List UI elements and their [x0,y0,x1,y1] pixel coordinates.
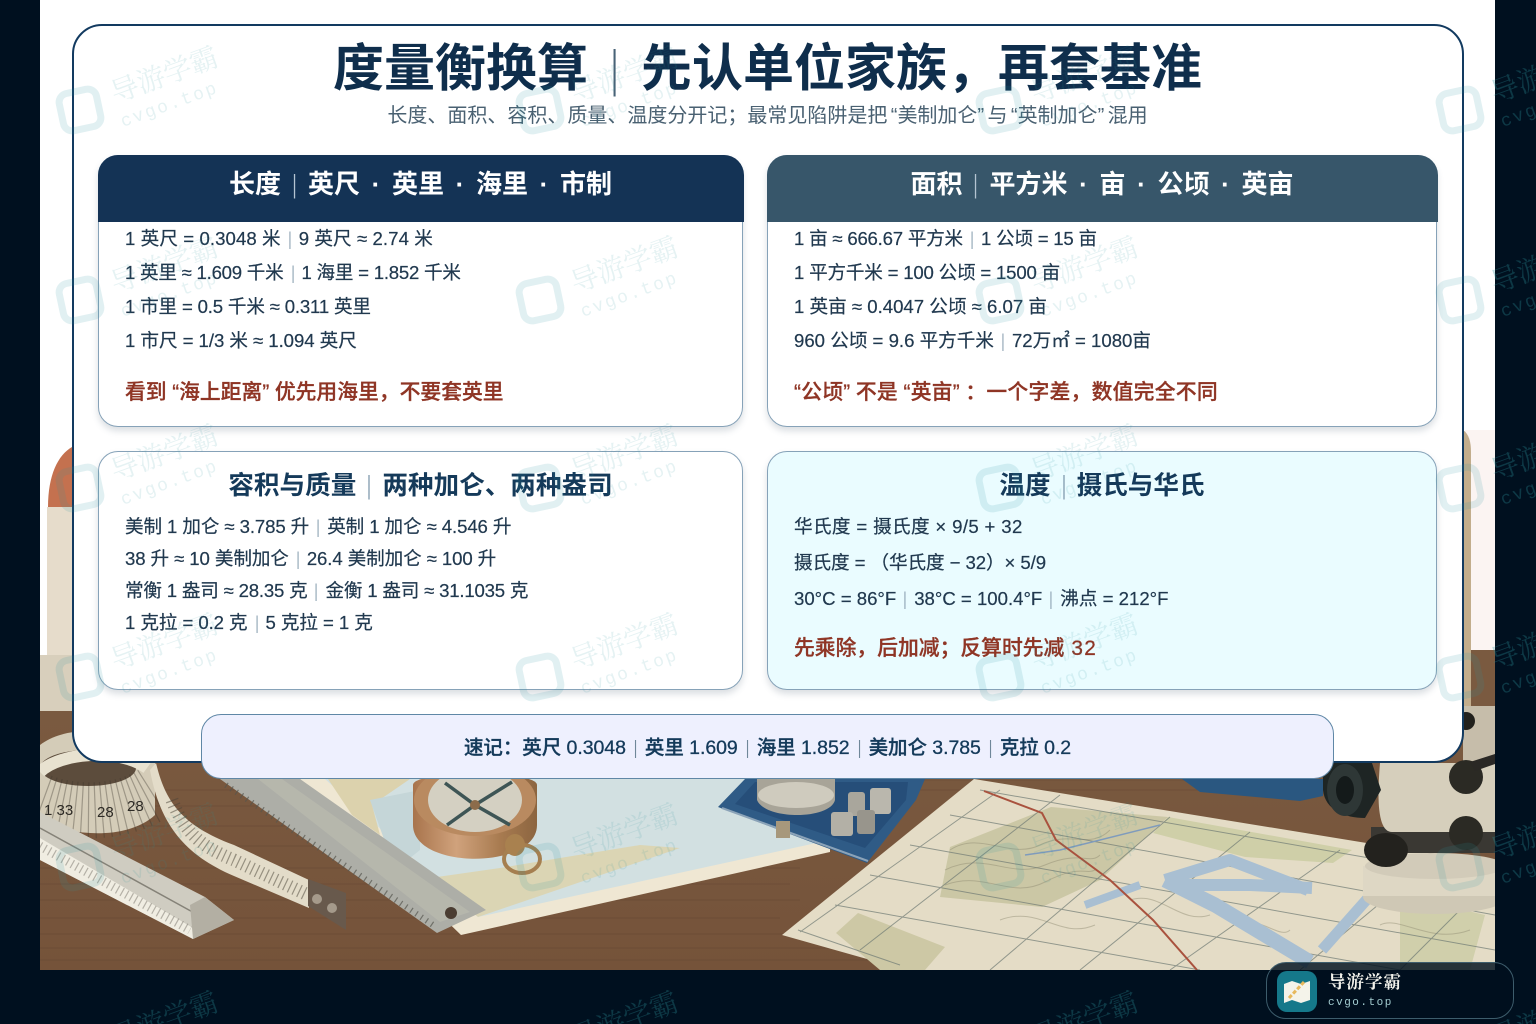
panel: area [767,155,1437,427]
watermark layer: cvgo.top [118,269,221,323]
panel title: volume and mass: 容积与质量 两种加仑、两种盎司 [228,472,613,500]
temperature line 2: 摄氏度 = （华氏度 − 32）× 5/9 [794,552,1046,573]
length line 2: 1 英里 ≈ 1.609 千米 1 海里 = 1.852 千米 [125,262,461,283]
length line 1: | [288,228,291,249]
area line 1: | [970,228,974,249]
compass [413,779,542,875]
panel header: area: · [1137,168,1146,198]
panel header: length: | [292,168,296,198]
watermark layer: cvgo.top [1038,836,1141,890]
steel ruler [220,779,486,933]
panel header: length: 长度 英尺 英里 海里 市制 [229,168,612,198]
panel header: area [766,154,1438,222]
watermark layer: cvgo.top [1038,79,1141,133]
brand badge [1266,962,1514,1019]
watermark layer: cvgo.top [118,646,221,700]
watermark layer: cvgo.top [578,646,681,700]
area line 4: | [1001,330,1005,351]
panel header: area: · [1221,168,1230,198]
panel title: volume and mass: | [367,472,371,500]
tape measure: 1 33 [44,802,73,819]
tape measure: 28 [97,804,114,821]
title: 度量衡换算 先认单位家族，再套基准 [333,40,1202,97]
temperature line 3: 30°C = 86°F 38°C = 100.4°F 沸点 = 212°F [794,588,1168,609]
length line 4: 1 市尺 = 1/3 米 ≈ 1.094 英尺 [125,330,357,351]
watermark layer: 导游学霸 [566,608,682,676]
watermark layer: 导游学霸 [1026,41,1142,109]
panel title: temperature: 温度 摄氏与华氏 [999,472,1205,500]
panel: volume and mass [98,451,743,690]
watermark layer: cvgo.top [118,836,221,890]
length line 1: 1 英尺 = 0.3048 米 9 英尺 ≈ 2.74 米 [125,228,433,249]
watermark layer: 导游学霸 [1026,419,1142,487]
watermark layer: cvgo.top [578,269,681,323]
title: | [611,40,618,97]
watermark layer: 导游学霸 [106,231,222,299]
blue case behind [1182,779,1323,801]
icon: folded map logo [1277,971,1317,1012]
length line 3: 1 市里 = 0.5 千米 ≈ 0.311 英里 [125,296,371,317]
temperature line 1: 华氏度 = 摄氏度 × 9/5 + 32 [794,516,1023,537]
watermark layer: cvgo.top [118,79,221,133]
temperature line 3: | [1050,588,1053,609]
watermark layer: cvgo.top [118,457,221,511]
watermark layer: cvgo.top [578,457,681,511]
theodolite base right strip [1463,706,1495,766]
topographic map [782,779,1495,970]
tape measure [40,731,346,930]
watermark layer: cvgo.top [1038,457,1141,511]
sea chart [300,779,830,935]
panel title: temperature: | [1062,472,1066,500]
brand name: 导游学霸 [1328,972,1402,992]
watermark layer: 导游学霸 [566,419,682,487]
main white card [72,24,1464,763]
length warning: 看到 “海上距离”优先用海里，不要套英里 [125,381,504,404]
panel header: length: · [456,168,464,198]
volume line 2: | [296,548,299,569]
watermark layer: 导游学霸 [106,419,222,487]
area line 4: 960 公顷 = 9.6 平方千米 72万㎡ = 1080亩 [794,330,1151,351]
panel header: length: · [372,168,380,198]
stone pillar left [40,447,72,711]
mass line 4: 1 克拉 = 0.2 克 5 克拉 = 1 克 [125,612,373,633]
quick memory pill: | [745,737,749,759]
watermark layer: 导游学霸 [566,231,682,299]
mass line 3: | [315,580,318,601]
watermark layer: 导游学霸 [1026,608,1142,676]
watermark layer: cvgo.top [1038,646,1141,700]
temperature warning: 先乘除，后加减；反算时先减 32 [794,637,1097,660]
watermark layer: 导游学霸 [566,41,682,109]
length line 2: | [291,262,294,283]
panel header: length [98,154,744,222]
quick memory pill: | [989,737,992,759]
volume line 2: 38 升 ≈ 10 美制加仑 26.4 美制加仑 ≈ 100 升 [125,548,496,569]
tan column right [1464,430,1471,706]
theodolite instrument [1323,712,1507,914]
panel header: area: 面积 平方米 亩 公顷 英亩 [910,168,1294,198]
area line 3: 1 英亩 ≈ 0.4047 公顷 ≈ 6.07 亩 [794,296,1047,317]
triangular scale ruler [40,812,234,939]
watermark layer: cvgo.top [578,836,681,890]
quick memory pill: | [857,737,861,759]
area warning: “公顷”不是 “英亩”：一个字差，数值完全不同 [794,381,1218,404]
watermark layer: 导游学霸 [106,608,222,676]
watermark layer: 导游学霸 [106,41,222,109]
brand url: cvgo.top [1328,997,1393,1009]
area line 2: 1 平方千米 = 100 公顷 = 1500 亩 [794,262,1060,283]
panel: temperature [767,451,1437,690]
panel header: length: · [540,168,548,198]
volume line 1: | [317,516,320,537]
panel header: area: · [1079,168,1088,198]
tape measure: 28 [127,798,144,815]
quick memory pill: | [634,737,637,759]
watermark layer: 导游学霸 [566,798,682,866]
weight set case [718,779,925,863]
quick memory pill [201,714,1334,779]
watermark layer: 导游学霸 [106,798,222,866]
volume line 1: 美制 1 加仑 ≈ 3.785 升 英制 1 加仑 ≈ 4.546 升 [125,516,511,537]
watermark layer: 导游学霸 [1026,231,1142,299]
watermark layer: cvgo.top [578,79,681,133]
subtitle: 长度、面积、容积、质量、温度分开记；最常见陷阱是把“美制加仑”与“英制加仑”混用 [387,105,1148,127]
watermark layer: 导游学霸 [1026,798,1142,866]
area line 1: 1 亩 ≈ 666.67 平方米 1 公顷 = 15 亩 [794,228,1097,249]
quick memory pill: 速记：英尺 0.3048 英里 1.609 海里 1.852 美加仑 3.785 克拉 0.2 [464,737,1071,759]
temperature line 3: | [904,588,907,609]
mass line 3: 常衡 1 盎司 ≈ 28.35 克 金衡 1 盎司 ≈ 31.1035 克 [125,580,528,601]
wooden table [40,650,1495,970]
watermark layer: cvgo.top [1038,269,1141,323]
mass line 4: | [255,612,258,633]
panel: length [98,155,743,427]
panel header: area: | [974,168,978,198]
